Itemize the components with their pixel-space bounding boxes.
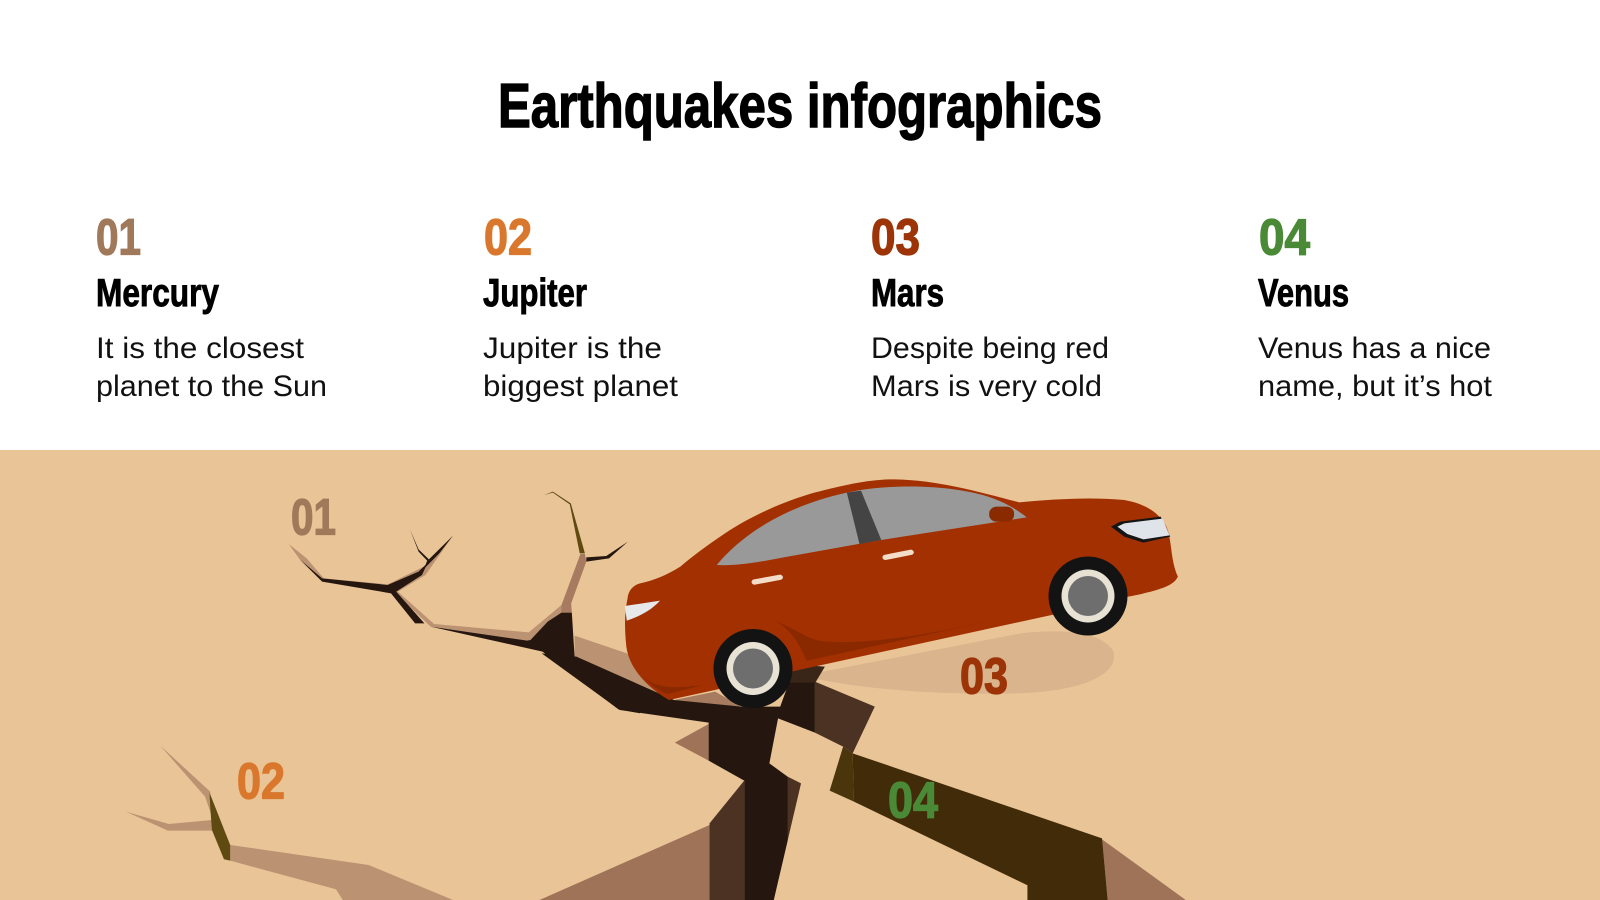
description Mercury xyxy=(96,332,327,403)
panel: 02 Jupiter xyxy=(483,208,679,403)
description Mars: Despite being red xyxy=(871,332,1109,365)
crack: lower left with olive seam xyxy=(126,746,453,900)
car side mirror xyxy=(989,507,1014,522)
number 03: 03 xyxy=(871,208,920,266)
car xyxy=(625,479,1178,708)
panel: 04 Venus xyxy=(1258,208,1493,403)
description Venus: Venus has a nice xyxy=(1258,332,1491,365)
description Mars xyxy=(871,332,1109,403)
description Jupiter: biggest planet xyxy=(483,370,679,403)
heading Jupiter: Jupiter xyxy=(483,272,587,315)
number 01: 01 xyxy=(96,208,141,266)
ground band xyxy=(0,450,1600,900)
description Venus: name, but it’s hot xyxy=(1258,370,1493,403)
map label 03: 03 xyxy=(960,648,1008,704)
map label 04: 04 xyxy=(888,772,939,828)
panel: 01 Mercury xyxy=(96,208,327,403)
description Mercury: It is the closest xyxy=(96,332,305,365)
rear wheel xyxy=(714,629,792,708)
description Jupiter xyxy=(483,332,679,403)
number 02: 02 xyxy=(484,208,532,266)
description Mars: Mars is very cold xyxy=(871,370,1102,403)
map label 01: 01 xyxy=(291,488,336,546)
car headlight xyxy=(1111,517,1170,543)
description Mercury: planet to the Sun xyxy=(96,370,327,403)
crack: central chasm xyxy=(540,653,1186,900)
heading Venus: Venus xyxy=(1258,272,1349,315)
car windows xyxy=(717,486,1027,565)
crack: upper left branches xyxy=(289,492,658,713)
heading Mars: Mars xyxy=(871,272,944,315)
front wheel xyxy=(1048,556,1128,636)
number 04: 04 xyxy=(1259,208,1311,266)
car shadow xyxy=(814,631,1114,694)
heading Mercury: Mercury xyxy=(96,272,219,315)
map label 02: 02 xyxy=(237,752,285,810)
car body xyxy=(625,479,1178,700)
car tail light xyxy=(625,601,660,621)
car door pillar xyxy=(847,491,881,544)
description Venus xyxy=(1258,332,1493,403)
description Jupiter: Jupiter is the xyxy=(483,332,662,365)
car door handles xyxy=(755,552,911,582)
panel: 03 Mars xyxy=(871,208,1109,403)
car lower shading xyxy=(640,613,1029,694)
title: Earthquakes infographics xyxy=(498,72,1102,141)
